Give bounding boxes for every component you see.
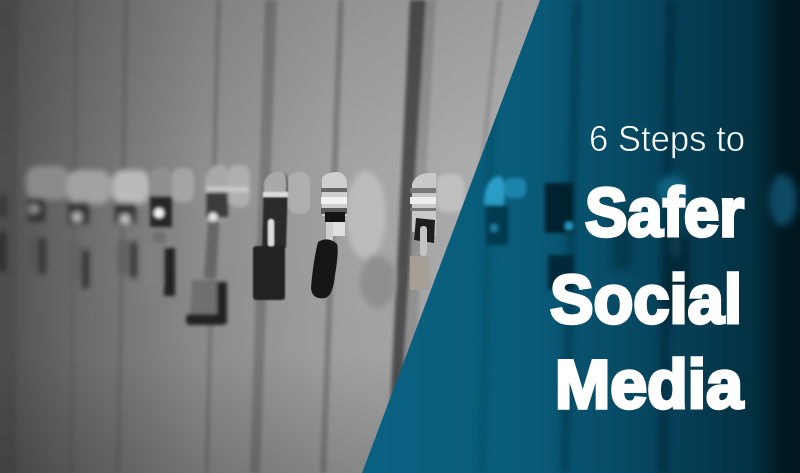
padlock: near, keyed black body in focus [311, 171, 396, 308]
padlock: mid-distance pair [145, 164, 250, 325]
headline: Safer [585, 174, 744, 251]
headline: Social [550, 261, 742, 338]
headline [550, 174, 744, 423]
title block [550, 118, 745, 423]
blurred locker and lock details inside teal panel [478, 0, 797, 473]
teal diagonal panel [362, 0, 800, 473]
subtitle: 6 Steps to [589, 118, 745, 159]
padlock: near, light body in focus [410, 173, 464, 290]
headline: Media [555, 346, 744, 423]
distant blurred padlocks [0, 166, 150, 288]
padlock: near, black body [253, 171, 310, 300]
